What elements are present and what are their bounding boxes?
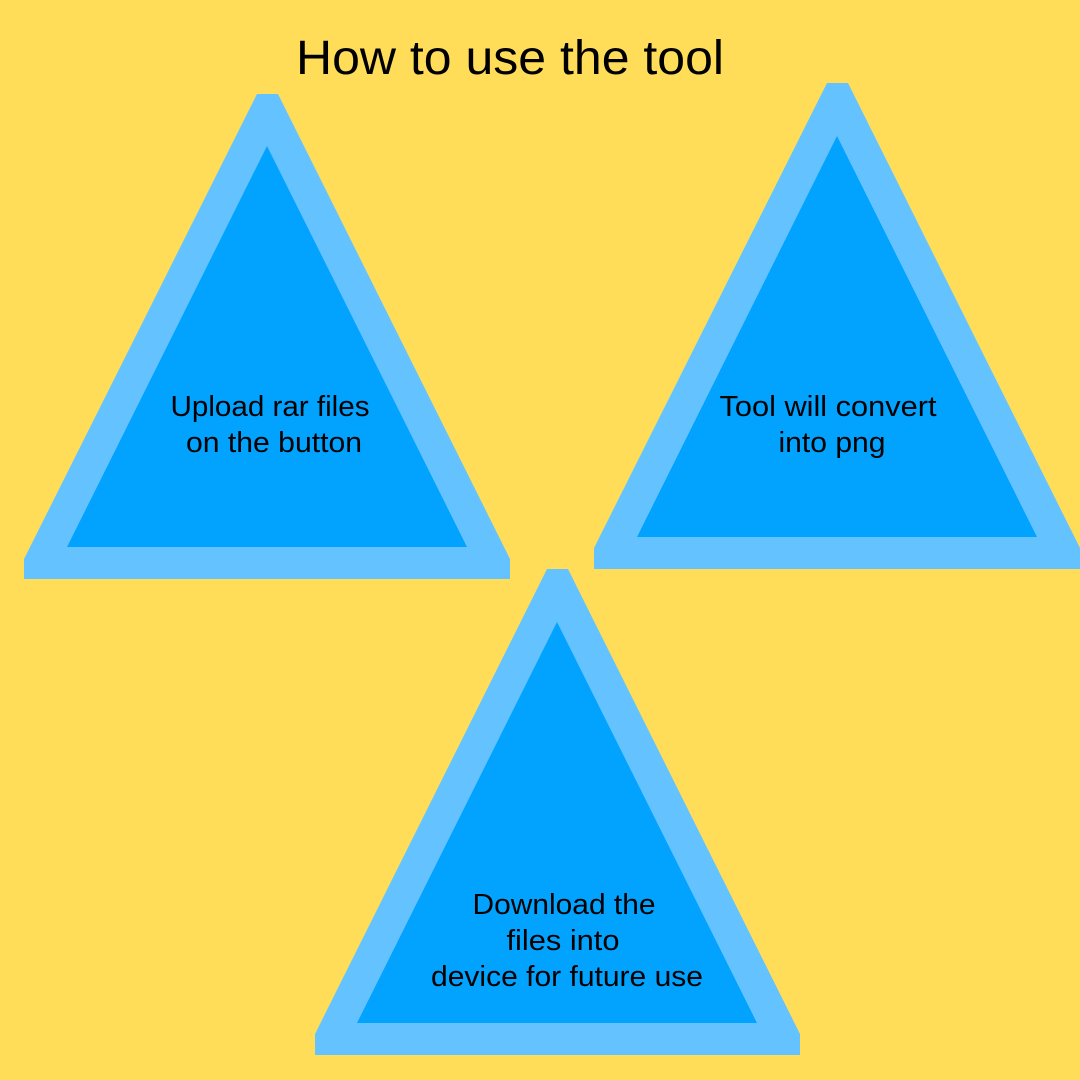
panel: step 1 upload [24, 94, 510, 579]
panel: step 2 convert [594, 83, 1080, 569]
step 1 text: on the button [186, 427, 362, 459]
step 3 text: Download the [472, 889, 656, 921]
step 1 text: Upload rar files [170, 391, 370, 423]
step 3 text: device for future use [431, 961, 703, 993]
step 2 text [720, 391, 936, 459]
step 2 text: into png [778, 427, 886, 459]
step 3 text: files into [506, 925, 620, 957]
panel: step 3 download [315, 569, 800, 1055]
title: How to use the tool [296, 32, 724, 85]
step 3 text [431, 889, 703, 993]
step 1 text [170, 391, 370, 459]
step 2 text: Tool will convert [720, 391, 936, 423]
